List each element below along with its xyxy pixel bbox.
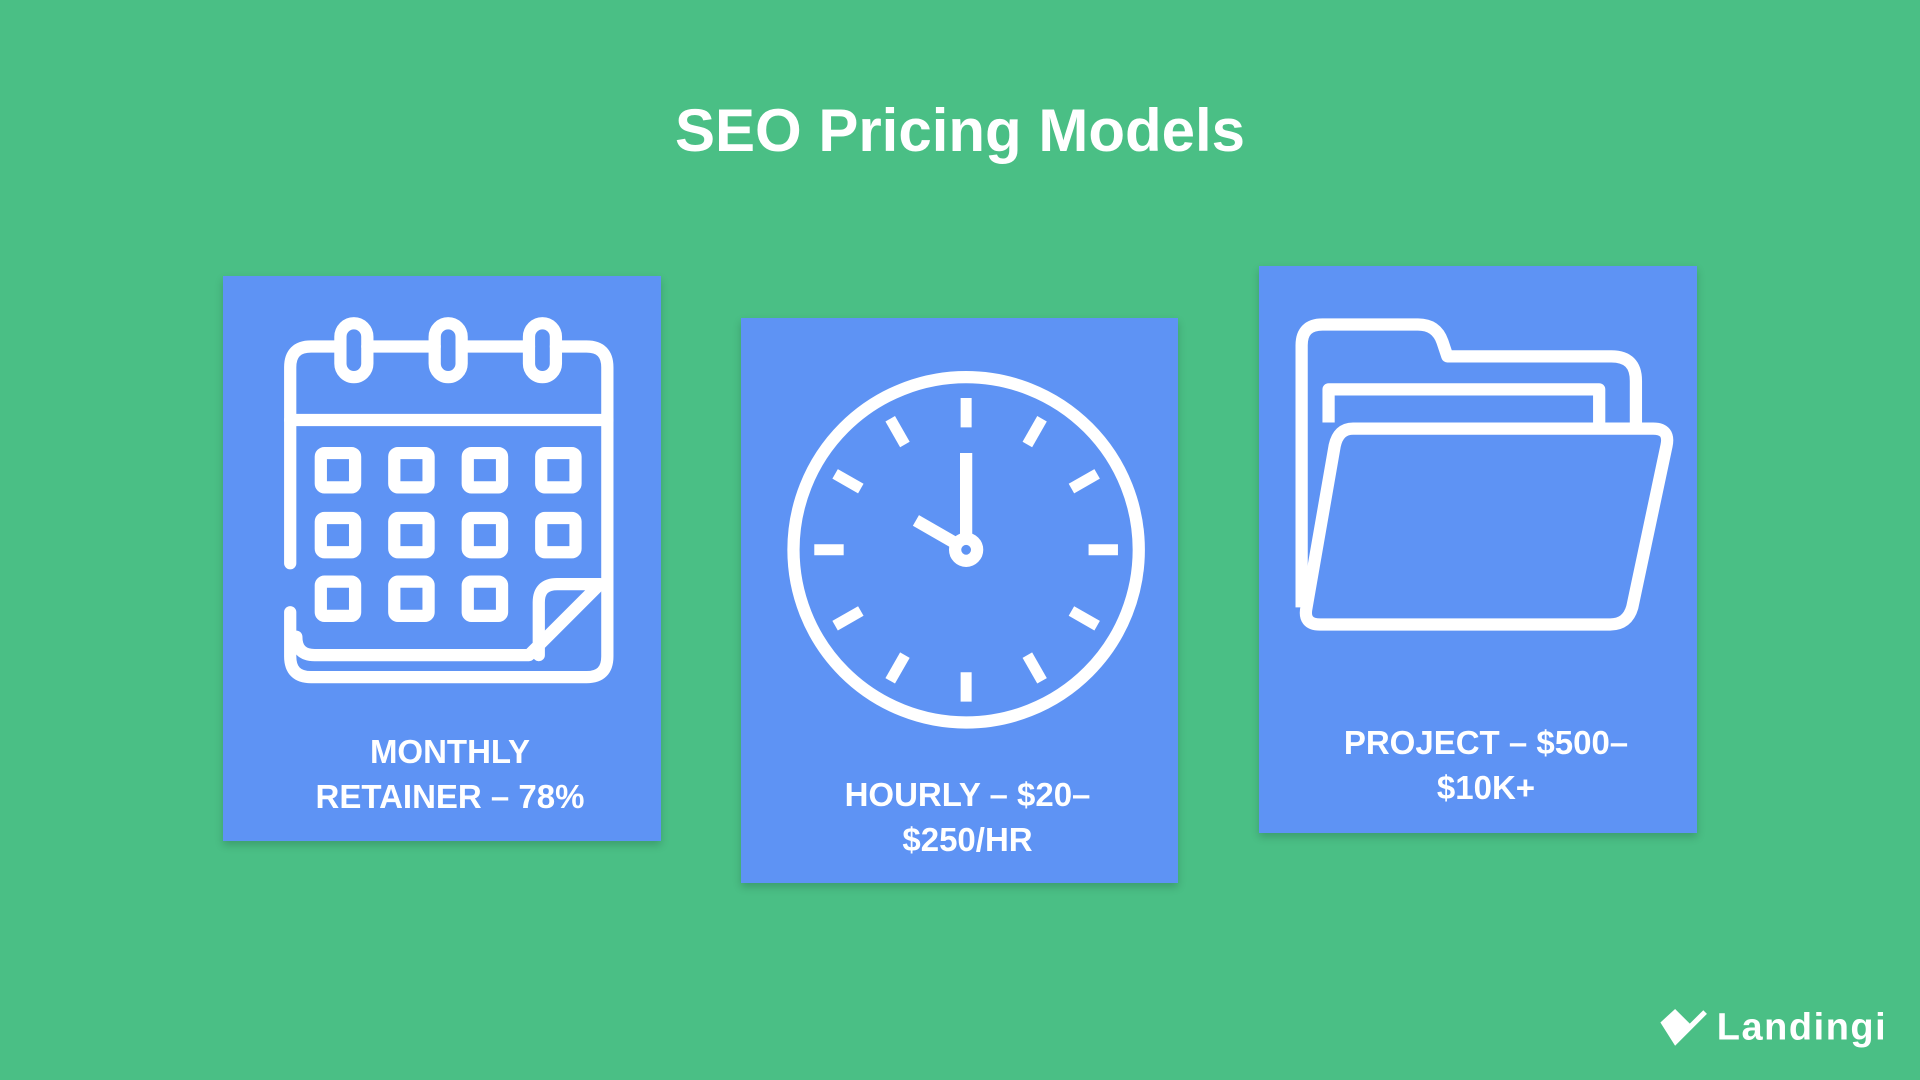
label: project [1344,724,1628,806]
label: project: $10K+ [1437,769,1535,806]
label: hourly [845,776,1090,858]
label: hourly: HOURLY – $20– [845,776,1090,813]
label: hourly: $250/HR [902,821,1033,858]
panel: project [1259,266,1697,833]
logo: Landingi: Landingi [1717,1007,1886,1049]
label: monthly retainer: MONTHLY [370,733,530,770]
icon: clock [793,377,1139,722]
icon: calendar [290,323,607,677]
panel: hourly [741,318,1178,883]
title: SEO Pricing Models [675,97,1245,164]
label: monthly retainer [316,733,584,815]
panel: monthly retainer [223,276,661,841]
label: project: PROJECT – $500– [1344,724,1628,761]
icon: folder [1302,324,1667,624]
label: monthly retainer: RETAINER – 78% [316,778,584,815]
